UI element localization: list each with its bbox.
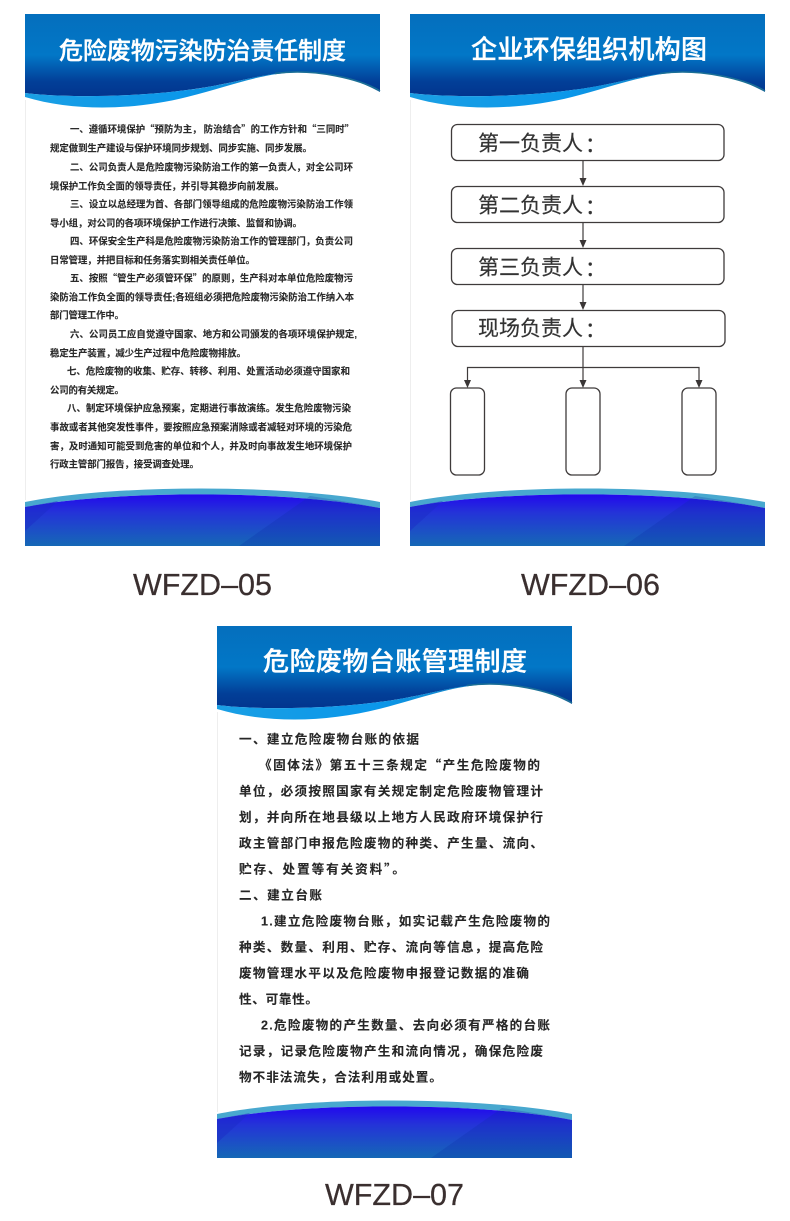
caption: WFZD-06: WFZD–06 <box>521 567 660 602</box>
panel background <box>25 14 380 546</box>
body text: 染防治工作负全面的领导责任;各班组必须把危险废物污染防治工作纳入本 <box>50 292 355 302</box>
body text: 部门管理工作中。 <box>50 310 124 320</box>
box: second responsible person: 第二负责人 <box>478 194 583 218</box>
body text: 一、遵循环境保护“预防为主， 防治结合”的工作方针和“三同时” <box>70 122 354 136</box>
body text: 害，及时通知可能受到危害的单位和个人，并及时向事故发生地环境保护 <box>50 440 352 452</box>
body text: 规定做到生产建设与保护环境同步规划、同步实施、同步发展。 <box>50 142 312 154</box>
body text: 事故或者其他突发性事件，要按照应急预案消除或者减轻对环境的污染危 <box>50 422 353 432</box>
box: third responsible person: ： <box>585 258 606 281</box>
body text <box>239 732 550 1084</box>
box: first responsible person: ： <box>585 134 606 157</box>
box: second responsible person <box>452 186 724 222</box>
body text <box>50 122 357 470</box>
body text: 七、危险废物的收集、贮存、转移、利用、处置活动必须遵守国家和 <box>67 366 350 376</box>
body text: 八、制定环境保护应急预案，定期进行事故演练。发生危险废物污染 <box>67 402 352 414</box>
body text: 划，并向所在地县级以上地方人民政府环境保护行 <box>239 810 543 824</box>
box: branch left <box>450 388 484 475</box>
box: third responsible person: 第三负责人 <box>478 256 583 280</box>
body text: 稳定生产装置，减少生产过程中危险废物排放。 <box>50 348 246 358</box>
flowchart <box>450 124 725 475</box>
footer banner <box>410 488 765 546</box>
header banner <box>217 626 572 720</box>
body text: 种类、数量、利用、贮存、流向等信息，提高危险 <box>239 940 543 954</box>
body text: 三、设立以总经理为首、各部门领导组成的危险废物污染防治工作领 <box>70 198 354 210</box>
body text: 境保护工作负全面的领导责任，并引导其稳步向前发展。 <box>50 180 284 192</box>
box: second responsible person: ： <box>585 196 606 219</box>
arrow: first to second <box>580 160 586 186</box>
body text: 五、按照“管生产必须管环保”的原则，生产科对本单位危险废物污 <box>70 270 354 284</box>
panel: hazardous waste pollution prevention responsibility system <box>25 14 380 546</box>
body text: 导小组，对公司的各项环境保护工作进行决策、监督和协调。 <box>50 218 302 228</box>
arrows: site to three branches <box>464 346 702 388</box>
body text: 二、公司负责人是危险废物污染防治工作的第一负责人，对全公司环 <box>70 162 354 172</box>
body text: 2.危险废物的产生数量、去向必须有严格的台账 <box>261 1018 550 1032</box>
body text: 四、环保安全生产科是危险废物污染防治工作的管理部门，负责公司 <box>70 236 353 246</box>
body text: 单位，必须按照国家有关规定制定危险废物管理计 <box>239 784 543 798</box>
box: first responsible person: 第一负责人 <box>478 132 583 156</box>
box: site responsible person <box>452 310 725 346</box>
body text: 性、可靠性。 <box>239 992 318 1006</box>
footer banner <box>25 488 380 546</box>
body text: 行政主管部门报告，接受调查处理。 <box>50 458 199 470</box>
caption: WFZD-05: WFZD–05 <box>133 567 272 602</box>
box: branch middle <box>566 388 600 475</box>
title: 企业环保组织机构图 <box>471 34 707 64</box>
footer banner <box>217 1100 572 1158</box>
body text: 1.建立危险废物台账，如实记载产生危险废物的 <box>261 914 550 928</box>
arrow: second to third <box>580 222 586 248</box>
body text: 政主管部门申报危险废物的种类、产生量、流向、 <box>239 836 543 850</box>
header banner <box>25 14 380 108</box>
panel background <box>217 626 572 1158</box>
caption: WFZD-07: WFZD–07 <box>325 1177 464 1212</box>
panel: hazardous waste ledger management system <box>217 626 572 1158</box>
box: site responsible person: ： <box>585 319 606 342</box>
box: third responsible person <box>452 248 724 284</box>
body text: 六、公司员工应自觉遵守国家、地方和公司颁发的各项环境保护规定, <box>70 328 357 340</box>
body text: 物不非法流失，合法利用或处置。 <box>239 1070 442 1084</box>
header banner <box>410 14 765 108</box>
body text: 贮存、处置等有关资料”。 <box>239 858 405 878</box>
body text: 《固体法》第五十三条规定“产生危险废物的 <box>259 754 540 774</box>
body text: 一、建立危险废物台账的依据 <box>239 732 419 746</box>
body text: 记录，记录危险废物产生和流向情况，确保危险废 <box>239 1044 543 1058</box>
title: 危险废物污染防治责任制度 <box>59 38 346 65</box>
body text: 日常管理，并把目标和任务落实到相关责任单位。 <box>50 254 255 266</box>
body text: 二、建立台账 <box>239 888 322 902</box>
body text: 公司的有关规定。 <box>50 384 124 396</box>
title: 危险废物台账管理制度 <box>263 646 527 676</box>
body text: 废物管理水平以及危险废物申报登记数据的准确 <box>239 966 529 980</box>
box: first responsible person <box>452 124 724 160</box>
box: site responsible person: 现场负责人 <box>478 318 583 340</box>
box: branch right <box>682 388 716 475</box>
arrow: third to site <box>580 284 586 310</box>
panel: enterprise environmental organization chart <box>410 14 765 546</box>
panel background <box>410 14 765 546</box>
